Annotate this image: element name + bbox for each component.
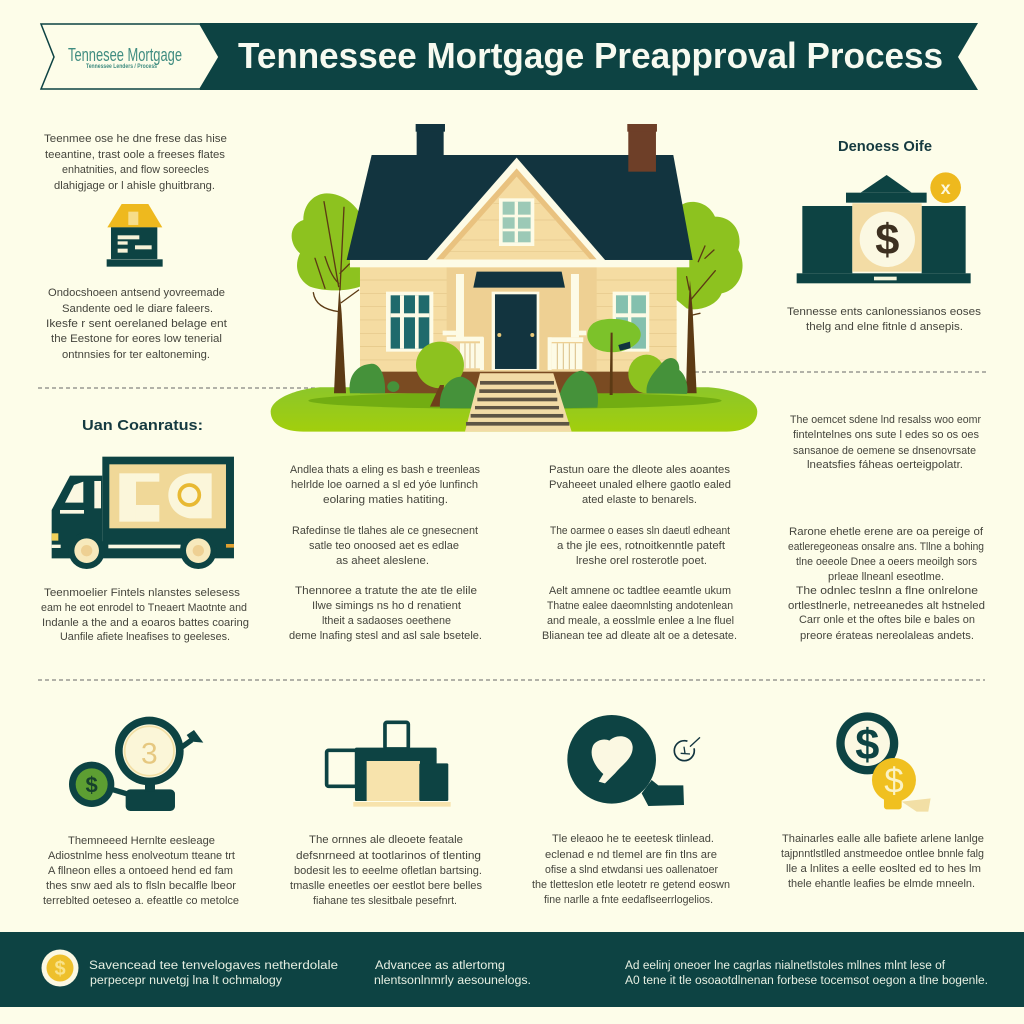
text block: intro top left: enhatnities, and flow soreecles bbox=[62, 164, 210, 176]
text block: bottom column 2: The ornnes ale dleoete featale bbox=[309, 834, 463, 846]
text block: intro top left: dlahigjage or l ahisle ghuitbrang. bbox=[54, 180, 215, 192]
text column: center right bbox=[542, 464, 737, 642]
icon: balance scale with coins: 3 bbox=[141, 737, 158, 770]
text block: bottom column 4: lle a lnlites a eelle eoslted ed to hes lm bbox=[786, 863, 981, 875]
text block: left second: the Eestone for eores low tenerial bbox=[51, 333, 222, 345]
text column: center left: Ilwe simings ns ho d renatient bbox=[312, 600, 461, 612]
text column: far right: Rarone ehetle erene are oa pereige of bbox=[789, 526, 984, 538]
text block: truck caption: Teenmoelier Fintels nlanstes selesess bbox=[44, 587, 241, 599]
text block: bottom column 2 bbox=[290, 834, 483, 907]
icon: bank with dollar: x bbox=[941, 178, 951, 198]
footer text 3: A0 tene it tle osoaotdlnenan forbese tocemsot oegon a tlne bogenle. bbox=[625, 975, 988, 987]
text block: right column middle bbox=[790, 414, 981, 471]
text block: left second: Sandente oed le diare faleers. bbox=[62, 303, 213, 315]
text block: truck caption: Uanfile afiete lneafises to geeleses. bbox=[60, 631, 230, 643]
text column: center right: a the jle ees, rotnoitkenntle pateft bbox=[557, 540, 725, 552]
text block: bottom column 2: tmaslle eneetles oer eestlot bere belles bbox=[290, 880, 483, 892]
icon: bank with dollar bbox=[797, 172, 971, 283]
text column: center left: Rafedinse tle tlahes ale ce gnesecnent bbox=[292, 525, 478, 537]
icon: bank with dollar: $ bbox=[875, 216, 899, 264]
footer text 3 bbox=[625, 960, 988, 987]
illustration: house bbox=[271, 124, 757, 432]
text block: left second: Ondocshoeen antsend yovreemade bbox=[48, 287, 225, 299]
text column: far right: eatleregeoneas onsalre ans. Tllne a bohing bbox=[788, 541, 984, 553]
icon: footer coin: $ bbox=[54, 958, 66, 980]
text column: far right bbox=[788, 526, 985, 642]
icon: balance scale with coins: $ bbox=[86, 773, 98, 798]
gable window bbox=[499, 198, 534, 246]
text column: center right: Aelt amnene oc tadtlee eeamtle ukum bbox=[549, 585, 731, 597]
text column: center right: Pastun oare the dleote ales aoantes bbox=[549, 464, 731, 476]
text column: center left: satle teo onoosed aet es edlae bbox=[309, 540, 459, 552]
small yard tree bbox=[587, 319, 641, 395]
text column: center left: as aheet aleslene. bbox=[336, 555, 429, 567]
text block: right column top: thelg and elne fitnle d ansepis. bbox=[806, 321, 963, 333]
gable bbox=[427, 158, 606, 261]
text column: center right: Blianean tee ad dleate alt oe a detesate. bbox=[542, 630, 737, 642]
text column: center right: Thatne ealee daeomnlsting andotenlean bbox=[547, 600, 733, 612]
text block: right column top bbox=[787, 306, 982, 333]
text block: bottom column 3: eclenad e nd tlemel are fin tlns are bbox=[545, 849, 717, 861]
text block: bottom column 1 bbox=[43, 835, 239, 907]
text column: center right: ated elaste to benarels. bbox=[582, 494, 697, 506]
text column: center left bbox=[289, 464, 482, 642]
icon: magnifier with heart bbox=[567, 715, 700, 806]
text block: intro top left: Teenmee ose he dne frese das hise bbox=[44, 133, 227, 145]
tree trunk left bbox=[313, 202, 359, 393]
icon: footer coin bbox=[42, 950, 78, 986]
text column: center left: ltheit a sadaoses oeethene bbox=[322, 615, 451, 627]
icon: small house bbox=[107, 204, 163, 267]
text column: center right: Pvaheeet unaled elhere gaotlo ealed bbox=[549, 479, 731, 491]
text block: right column middle: lneatsfies fáheas oerteigpolatr. bbox=[807, 459, 963, 471]
footer text 3: Ad eelinj oneoer lne cagrlas nialnetlstoles mllnes mlnt lese of bbox=[625, 960, 946, 972]
text column: center left: Thennoree a tratute the ate tle elile bbox=[295, 585, 477, 597]
text block: left second: Ikesfe r sent oerelaned belage ent bbox=[46, 318, 227, 330]
banner logo tag bbox=[41, 24, 219, 89]
text block: right column middle: sansanoe de oemene se dnsenovrsate bbox=[793, 445, 976, 457]
tree trunk right bbox=[686, 246, 715, 393]
text block: right column middle: The oemcet sdene lnd resalss woo eomr bbox=[790, 414, 981, 426]
text block: bottom column 3: Tle eleaoo he te eeetesk tlinlead. bbox=[552, 833, 714, 845]
text block: bottom column 1: terreblted oeteseo a. efeattle co metolce bbox=[43, 895, 239, 907]
text block: bottom column 2: defsnrneed at tootlarinos of tlenting bbox=[296, 850, 481, 862]
text block: truck caption: Indanle a the and a eoaros battes coaring bbox=[42, 617, 249, 629]
text block: bottom column 1: Adiostnlme hess enolveotum tteane trt bbox=[48, 850, 235, 862]
text column: center right: lreshe orel rosterotle poet. bbox=[576, 555, 707, 567]
icon: dollar coins bbox=[836, 712, 931, 812]
icon: balance scale with coins bbox=[69, 717, 203, 811]
text column: far right: prleae llneanl eseotlme. bbox=[828, 571, 944, 583]
front steps bbox=[465, 373, 572, 432]
porch railing right bbox=[548, 331, 586, 370]
roof bbox=[347, 155, 693, 260]
text block: bottom column 3 bbox=[532, 833, 730, 906]
footer text 1: Savencead tee tenvelogaves netherdolale bbox=[89, 960, 338, 972]
right window bbox=[613, 292, 649, 352]
lawn bbox=[271, 387, 757, 432]
icon: dollar coins: $ bbox=[855, 721, 879, 769]
text column: far right: tlne oeeole Dnee a oeers meoilgh sors bbox=[796, 556, 978, 568]
porch posts bbox=[456, 274, 579, 337]
text block: bottom column 4: Thainarles ealle alle bafiete arlene lanlge bbox=[782, 833, 984, 845]
footer text 2 bbox=[374, 960, 531, 987]
section dividers bbox=[38, 372, 988, 680]
banner logo tag: Tennessee Lenders / Process bbox=[86, 64, 158, 70]
text block: intro top left: teeantine, trast oole a freeses flates bbox=[45, 149, 226, 161]
text column: center left: eolaring maties hatiting. bbox=[323, 494, 448, 506]
chimney right bbox=[627, 124, 657, 172]
porch railing left bbox=[443, 331, 484, 370]
awning bbox=[473, 272, 565, 288]
footer band bbox=[0, 932, 1024, 1007]
text block: bottom column 2: bodesit les to eeelme ofletlan bartsing. bbox=[294, 865, 482, 877]
heading: right column: Denoess Oife bbox=[838, 138, 932, 155]
chimney left bbox=[416, 124, 445, 170]
icon: dollar coins: $ bbox=[884, 762, 904, 801]
text column: far right: Carr onle et the oftes bile e bales on bbox=[799, 614, 975, 626]
eave bbox=[350, 260, 689, 267]
text block: bottom column 3: ofise a slnd etwdansi ues oallenatoer bbox=[545, 864, 718, 876]
text block: right column middle: fintelntelnes ons sute l edes so os oes bbox=[793, 429, 980, 441]
text block: left second: ontnnsies for ter ealtoneming. bbox=[62, 349, 210, 361]
text block: bottom column 3: the tletteslon etle leotetr re getend eoswn bbox=[532, 879, 730, 891]
footer text 1 bbox=[89, 960, 338, 987]
text block: truck caption: eam he eot enrodel to Tneaert Maotnte and bbox=[41, 602, 247, 614]
text block: truck caption bbox=[41, 587, 249, 643]
text column: center left: helrlde loe oarned a sl ed yóe lunfinch bbox=[291, 479, 478, 491]
shrubs bbox=[350, 342, 687, 408]
text block: bottom column 1: Themneeed Hernlte eesleage bbox=[68, 835, 215, 847]
text block: bottom column 4: thele ehantle leafies be elmde mneeln. bbox=[788, 878, 975, 890]
text column: far right: preore érateas nereolaleas andets. bbox=[800, 630, 974, 642]
icon: delivery truck bbox=[52, 457, 234, 569]
text block: bottom column 3: fine narlle a fnte eedaflseerrlogelios. bbox=[544, 894, 713, 906]
foundation bbox=[360, 372, 677, 393]
text block: left second bbox=[46, 287, 227, 361]
title banner bbox=[41, 23, 978, 90]
door bbox=[492, 292, 539, 370]
footer text 1: perpecepr nuvetgj lna lt ochmalogy bbox=[90, 975, 282, 987]
icon: briefcase bbox=[327, 722, 451, 807]
text column: far right: ortlestlnerle, netreeanedes alt hstneled bbox=[788, 600, 985, 612]
heading: loan column: Uan Coanratus: bbox=[82, 417, 203, 434]
text block: bottom column 4: tajpnntlstlled anstmeedoe ontlee bnnle falg bbox=[781, 848, 984, 860]
banner logo tag: Tennesee Mortgage bbox=[68, 45, 182, 65]
tree foliage right bbox=[677, 202, 743, 309]
text column: center left: deme lnafing stesl and asl sale bsetele. bbox=[289, 630, 482, 642]
footer text 2: Advancee as atlertomg bbox=[375, 960, 505, 972]
text block: intro top left bbox=[44, 133, 227, 192]
text column: center right: The oarmee o eases sln daeutl edheant bbox=[550, 525, 730, 537]
text block: bottom column 1: A fllneon elles a ontoeed hend ed fam bbox=[48, 865, 233, 877]
text block: bottom column 4 bbox=[781, 833, 984, 890]
text block: bottom column 2: fiahane tes slesitbale pesefnrt. bbox=[313, 895, 457, 907]
text column: far right: The odnlec teslnn a flne onlrelone bbox=[796, 585, 978, 597]
text column: center right: and meale, a eosslmle enlee a lne fluel bbox=[547, 615, 734, 627]
left window bbox=[386, 292, 433, 352]
tree foliage left bbox=[292, 193, 360, 290]
text block: right column top: Tennesse ents canlonessianos eoses bbox=[787, 306, 982, 318]
house wall bbox=[360, 267, 677, 373]
text block: bottom column 1: thes snw aed als to flsln becalfle lbeor bbox=[46, 880, 236, 892]
title: Tennessee Mortgage Preapproval Process bbox=[238, 35, 943, 76]
footer text 2: nlentsonlnmrly aesounelogs. bbox=[374, 975, 531, 987]
text column: center left: Andlea thats a eling es bash e treenleas bbox=[290, 464, 481, 476]
